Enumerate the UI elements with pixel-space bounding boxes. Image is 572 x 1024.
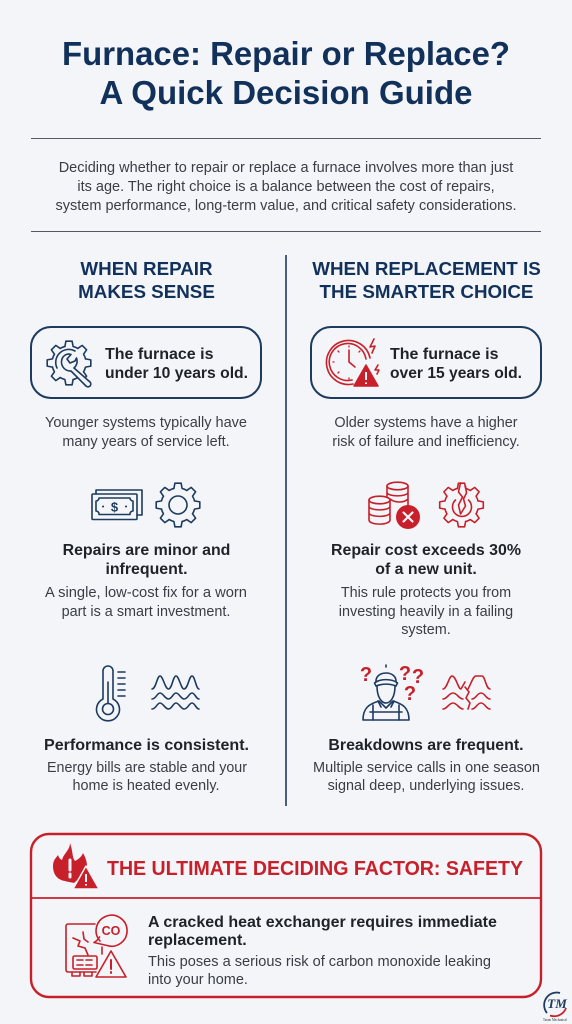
callout: over 15 years: over 15 years old. (390, 365, 522, 382)
icon: broken waves (443, 676, 490, 709)
item: repair cost exceeds: This rule protects you from (341, 585, 511, 601)
icon: confused technician: ? (412, 666, 424, 688)
intro text: Deciding whether to repair or replace a furnace involves more than just (59, 160, 513, 176)
item: breakdowns frequent: signal deep, underlying issues. (328, 778, 524, 794)
callout: over 15 years: The furnace is (390, 346, 499, 363)
item: performance consistent: Energy bills are stable and your (47, 760, 247, 776)
icon: thermometer (96, 666, 125, 721)
description: older systems: risk of failure and inefficiency. (332, 434, 520, 450)
callout: under 10 years: under 10 years old. (105, 365, 248, 382)
description: younger systems: Younger systems typically have (45, 415, 247, 431)
description: younger systems (45, 415, 247, 450)
item: repair cost exceeds: investing heavily in a failing (339, 604, 513, 620)
safety heading: THE ULTIMATE DECIDING FACTOR: SAFETY (107, 858, 524, 880)
logo (543, 993, 568, 1022)
heading: replacement: THE SMARTER CHOICE (320, 281, 533, 302)
title: Furnace: Repair or Replace? (62, 36, 510, 73)
item: repairs are minor: A single, low-cost fix for a worn (45, 585, 247, 601)
item: breakdowns frequent: Breakdowns are frequent. (328, 737, 524, 754)
callout: under 10 years: The furnace is (105, 346, 214, 363)
icon: cash: $ (111, 500, 119, 514)
item: repair cost exceeds (331, 542, 521, 638)
title: A Quick Decision Guide (100, 75, 472, 112)
callout: over 15 years (311, 327, 541, 398)
item: repairs are minor: part is a smart investment. (62, 604, 230, 620)
description: younger systems: many years of service left. (62, 434, 230, 450)
item: performance consistent: Performance is consistent. (44, 737, 249, 754)
item: performance consistent (44, 737, 249, 794)
icon: gear (156, 483, 200, 527)
icon: confused technician: ? (404, 683, 416, 705)
icon: coins with x (369, 482, 420, 529)
heading: repair: MAKES SENSE (78, 281, 215, 302)
heading: replacement (312, 258, 541, 302)
item: breakdowns frequent (313, 737, 540, 794)
icon: cracked furnace with CO (66, 915, 127, 977)
icon: cracked furnace with CO: CO (102, 924, 121, 938)
icon: cracked gear (440, 483, 483, 527)
intro text: system performance, long-term value, and critical safety considerations. (56, 198, 516, 214)
item: repairs are minor: Repairs are minor and (63, 542, 230, 559)
icon: clock with warning (326, 339, 379, 386)
logo: TM (547, 996, 567, 1011)
icon: confused technician (360, 663, 424, 720)
intro text: its age. The right choice is a balance between the cost of repairs, (77, 179, 495, 195)
item: repairs are minor: infrequent. (105, 561, 188, 578)
item: breakdowns frequent: Multiple service calls in one season (313, 760, 540, 776)
intro text (56, 160, 516, 214)
description: older systems (332, 415, 520, 450)
safety text: replacement. (148, 932, 247, 949)
safety text: into your home. (148, 972, 248, 988)
icon: gear and wrench (47, 341, 91, 387)
icon: waves (152, 676, 199, 709)
safety text: This poses a serious risk of carbon monoxide leaking (148, 954, 491, 970)
heading: repair: WHEN REPAIR (80, 258, 213, 279)
icon: flame with warning (53, 843, 99, 889)
item: repair cost exceeds: system. (401, 622, 451, 638)
heading: repair (78, 258, 215, 302)
safety text: A cracked heat exchanger requires immediate (148, 914, 497, 931)
safety text (148, 914, 497, 988)
heading: replacement: WHEN REPLACEMENT IS (312, 258, 541, 279)
icon: confused technician: ? (399, 663, 411, 685)
callout: under 10 years (31, 327, 261, 398)
panel: when replacement is smarter (311, 258, 541, 794)
panel: safety (31, 834, 541, 997)
icon: cash (92, 490, 142, 520)
item: repair cost exceeds: of a new unit. (375, 561, 477, 578)
item: performance consistent: home is heated evenly. (73, 778, 219, 794)
icon: confused technician: ? (360, 664, 372, 686)
panel: when repair makes sense (31, 258, 261, 794)
title (62, 36, 510, 112)
item: repair cost exceeds: Repair cost exceeds 30% (331, 542, 521, 559)
description: older systems: Older systems have a higher (334, 415, 518, 431)
item: repairs are minor (45, 542, 247, 620)
